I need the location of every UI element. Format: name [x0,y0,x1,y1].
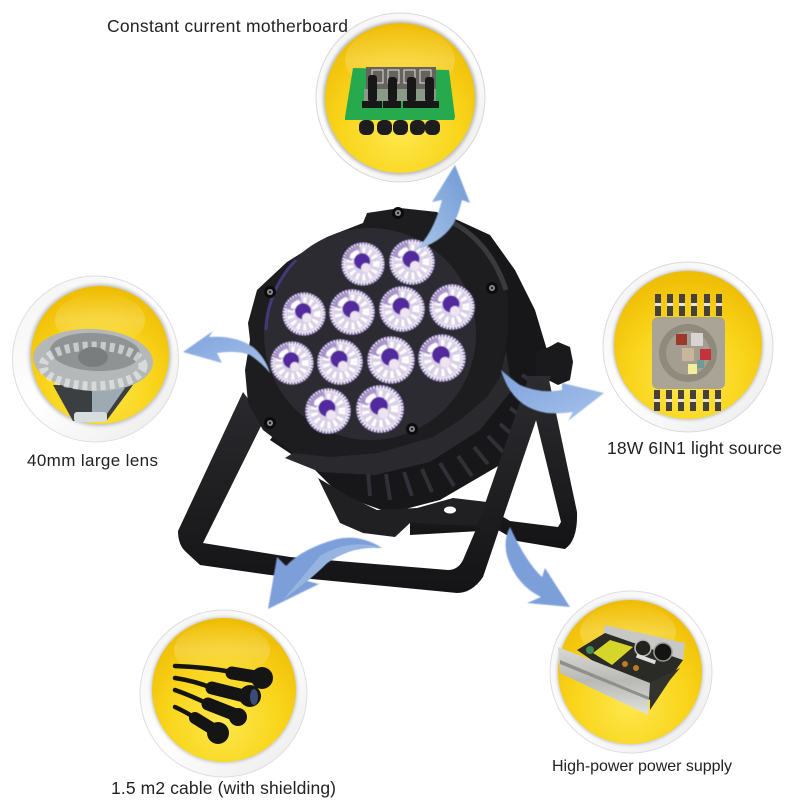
screws [264,207,498,435]
label: 1.5 m2 cable: 1.5 m2 cable (with shielding) [111,778,336,798]
yoke hole [444,506,456,514]
lower yoke [318,478,487,537]
LED array [270,239,475,434]
title: constant current motherboard: Constant current motherboard [107,16,348,36]
icon: power supply unit [558,625,685,715]
icon: control board [345,67,455,135]
icon: cables [175,666,273,744]
arrow: to lens [183,331,270,373]
front bracket [178,376,551,593]
face plate [264,228,476,440]
badge ring: lens [12,276,178,442]
arrow: to cable [268,538,382,609]
badge ring: light source [603,262,773,432]
badge ring: cable [140,610,307,777]
label: 18W 6IN1 light source: 18W 6IN1 light source [607,438,782,458]
arrow: to light source [501,370,604,421]
bezel [245,208,508,457]
icon: LED chip [652,294,725,411]
arrow: to motherboard [415,165,470,250]
panel: high-power power supply [550,591,712,753]
icon: lens [31,326,155,422]
panel: 1.5 m2 cable [140,610,307,777]
label: high-power power supply: High-power power supply [552,758,732,775]
panel: 40mm large lens [12,276,178,442]
panel: constant current motherboard [316,13,485,182]
label: 40mm large lens: 40mm large lens [27,451,158,470]
rear bracket [410,375,577,549]
product: LED par light [178,207,577,593]
housing with fins [270,212,547,513]
badge ring: motherboard [316,13,485,182]
panel: 18W 6IN1 light source [603,262,773,432]
arrow: to power supply [506,527,570,607]
badge ring: power supply [550,591,712,753]
knob [536,342,573,385]
